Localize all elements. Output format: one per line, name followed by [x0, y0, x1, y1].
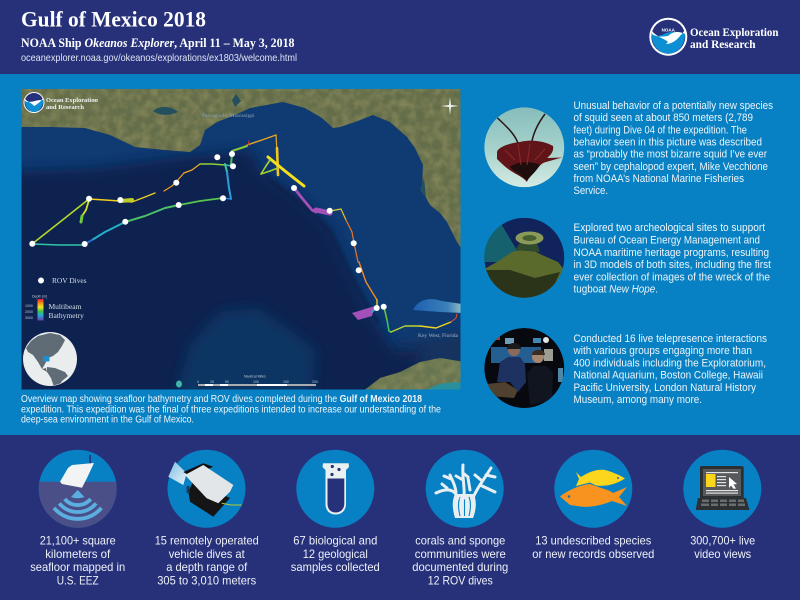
- middle blue band: [0, 74, 800, 435]
- text: archeological sites: ever collection of images of the wreck of the: [574, 271, 770, 283]
- text: archeological sites: tugboat New Hope.: [574, 284, 658, 296]
- control room monitors: [491, 347, 541, 363]
- scale bar: 50: [225, 380, 229, 384]
- stat text: 12 geological: [303, 547, 368, 561]
- subtitle: NOAA Ship Okeanos Explorer, April 11 – May 3, 2018: [21, 35, 295, 50]
- purple bathymetry swath: [352, 306, 375, 320]
- legend: multibeam bathymetry: Bathymetry: [48, 311, 84, 320]
- ROV dive markers: [29, 151, 387, 311]
- stat text: U.S. EEZ: [57, 574, 99, 588]
- title: Gulf of Mexico 2018: [21, 6, 206, 32]
- squid arms: [498, 114, 545, 143]
- southern shelf: [176, 307, 316, 390]
- stat: video views: [683, 450, 761, 561]
- header logo: NOAA Ocean Exploration and Research: and Research: [690, 39, 756, 51]
- icon: coral: [426, 450, 504, 528]
- stat text: or new records observed: [532, 547, 654, 561]
- scale bar: Nautical Miles: [244, 374, 266, 378]
- place labels: Key West, Florida: [418, 333, 458, 339]
- stat text: seafloor mapped in: [30, 560, 125, 574]
- legend: multibeam bathymetry: 3000: [25, 316, 33, 320]
- southeast strait: [397, 332, 460, 362]
- text: telepresence interactions: Museum, among many more.: [574, 394, 702, 406]
- icon: test tube: [296, 450, 374, 528]
- stat text: [412, 534, 508, 588]
- expedition url: oceanexplorer.noaa.gov/okeanos/explorations/ex1803/welcome.html: [21, 53, 297, 64]
- compass rose: [441, 97, 459, 115]
- text: squid behaviour: Unusual behavior of a potentially new species: [574, 100, 773, 112]
- stat: ROV dives: [155, 450, 259, 588]
- left presenter: [497, 343, 526, 392]
- stat text: 13 undescribed species: [535, 534, 651, 548]
- stat text: 67 biological and: [293, 534, 377, 548]
- text: archeological sites: Bureau of Ocean Energy Management and: [574, 235, 760, 247]
- text: archeological sites: [574, 222, 772, 296]
- stat text: [291, 534, 380, 574]
- bottom stats band: [0, 435, 800, 600]
- text: telepresence interactions: Pacific University, London Natural History: [574, 382, 756, 394]
- photo: telepresence control room: [484, 328, 564, 408]
- map caption: deep-sea environment in the Gulf of Mexico.: [21, 414, 194, 425]
- legend: multibeam bathymetry: Depth [m]: [32, 294, 47, 298]
- stat text: kilometers of: [45, 547, 111, 561]
- stat text: 21,100+ square: [40, 534, 116, 548]
- legend: multibeam bathymetry: 2000: [25, 310, 33, 314]
- locator globe: [23, 332, 77, 388]
- scale bar: [197, 374, 318, 386]
- wreck hull: [486, 250, 563, 298]
- ship tracks with multibeam colours: [32, 135, 457, 332]
- stat text: [30, 534, 125, 588]
- scale bar: 25: [210, 380, 214, 384]
- text: squid behaviour: from NOAA’s National Marine Fisheries: [574, 173, 744, 185]
- panel: overview map: [22, 89, 460, 390]
- boiler stack: [515, 242, 540, 252]
- deep basin: [22, 146, 422, 390]
- stat text: [532, 534, 654, 561]
- stat text: 305 to 3,010 meters: [157, 574, 256, 588]
- stat text: communities were: [415, 547, 506, 561]
- shoal near Key West: [413, 299, 462, 313]
- text: telepresence interactions: National Aquarium, Boston College, Hawaii: [574, 370, 763, 382]
- map caption: expedition. This expedition was the final of three expeditions intended to increase our understanding of the: [21, 404, 441, 415]
- stat text: [155, 534, 259, 588]
- map logo: and Research: [46, 104, 85, 111]
- stat text: 12 ROV dives: [428, 574, 493, 588]
- shoal islet: [176, 380, 182, 388]
- header logo: NOAA Ocean Exploration and Research: [649, 18, 779, 56]
- right presenter: [527, 350, 553, 405]
- text: squid behaviour: [574, 100, 773, 197]
- legend: multibeam bathymetry: Multibeam: [48, 302, 82, 311]
- icon: laptop: [683, 450, 761, 528]
- lake and coastal water: [153, 94, 426, 198]
- text: telepresence interactions: 400 individuals including the Exploratorium,: [574, 357, 766, 369]
- legend: ROV dives: ROV Dives: [52, 276, 87, 285]
- squid body: [497, 141, 562, 182]
- text: squid behaviour: as “probably the most bizarre squid I’ve ever: [574, 149, 767, 161]
- logo wordmark: Ocean Exploration: [690, 27, 779, 39]
- blue-green water left: [484, 222, 518, 262]
- legend: ROV dives: [38, 278, 86, 284]
- scale bar: 0: [197, 380, 199, 384]
- photo: squid: [484, 107, 564, 187]
- text: squid behaviour: of squid seen at about 850 meters (2,789: [574, 112, 753, 124]
- text: squid behaviour: seen” by cephalopod expert, Mike Vecchione: [574, 161, 768, 173]
- stat text: 15 remotely operated: [155, 534, 259, 548]
- icon: ship and sonar: [39, 450, 117, 528]
- map logo: [24, 92, 99, 113]
- stat text: [690, 534, 755, 561]
- stat text: samples collected: [291, 560, 380, 574]
- scale bar: 200: [312, 380, 318, 384]
- text: telepresence interactions: with various groups engaging more than: [573, 345, 752, 357]
- stat text: 300,700+ live: [690, 534, 755, 548]
- photo: shipwreck: [484, 218, 566, 300]
- stat: samples: [291, 450, 380, 574]
- desk: [487, 382, 518, 398]
- icon: NOAA seal: NOAA: [662, 28, 676, 32]
- text: squid behaviour: feet) during Dive 04 of the expedition. The: [574, 124, 747, 136]
- text: squid behaviour: Service.: [574, 185, 608, 197]
- text: telepresence interactions: [573, 333, 767, 406]
- stat text: vehicle dives at: [169, 547, 245, 561]
- stat text: corals and sponge: [415, 534, 506, 548]
- Yucatan land: [365, 358, 460, 390]
- Yucatan coastal water: [428, 382, 460, 390]
- scale bar: 100: [253, 380, 259, 384]
- map caption: [21, 394, 441, 425]
- stat: corals and sponges: [412, 450, 508, 588]
- place labels: Pascagoula, Mississippi: [202, 113, 255, 119]
- stat text: a depth range of: [166, 560, 248, 574]
- legend: multibeam bathymetry: [25, 294, 84, 320]
- scale bar: 150: [283, 380, 289, 384]
- ocean base: [22, 102, 460, 351]
- icon: fish: [554, 450, 632, 528]
- stat text: documented during: [412, 560, 508, 574]
- stat: seafloor mapped: [30, 450, 125, 588]
- text: squid behaviour: behavior seen in this picture was described: [574, 136, 762, 148]
- map caption: Overview map showing seafloor bathymetry and ROV dives completed during the Gulf of Mexico 2018: [21, 394, 422, 405]
- place labels: [202, 113, 458, 339]
- text: archeological sites: Explored two archeological sites to support: [574, 222, 766, 234]
- northern land: [15, 85, 465, 255]
- header band: [0, 0, 800, 74]
- map logo: Ocean Exploration: [46, 97, 99, 104]
- legend: multibeam bathymetry: 1000: [25, 304, 33, 308]
- icon: remotely operated vehicle: [168, 450, 246, 528]
- text: telepresence interactions: Conducted 16 live telepresence interactions: [574, 333, 767, 345]
- stat: new species: [532, 450, 654, 561]
- stat text: video views: [694, 547, 751, 561]
- text: archeological sites: NOAA maritime heritage programs, resulting: [574, 247, 769, 259]
- escarpment shading: [262, 172, 378, 322]
- text: archeological sites: in 3D models of both sites, including the first: [574, 259, 772, 271]
